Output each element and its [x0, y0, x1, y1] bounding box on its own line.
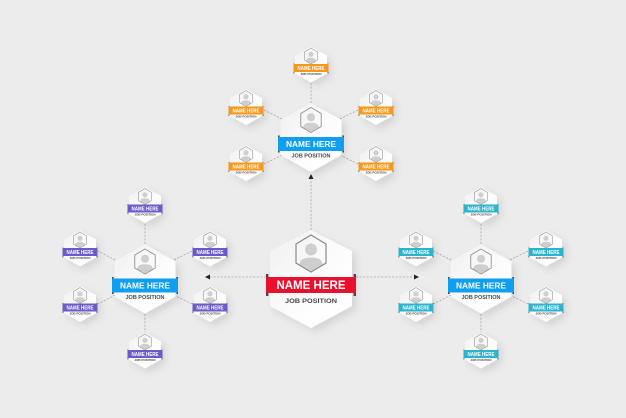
node: purple bottom	[128, 332, 162, 368]
node: left centre manager	[112, 244, 178, 314]
node: teal bottom: NAME HERE	[468, 352, 495, 358]
node: purple lower left: NAME HERE	[66, 305, 94, 311]
node: left centre manager: NAME HERE	[120, 281, 170, 291]
node: purple upper right	[192, 230, 228, 266]
node: teal lower left	[398, 286, 434, 322]
connectors: top group	[264, 83, 358, 164]
node: teal lower right	[528, 286, 564, 322]
node: purple lower right: NAME HERE	[196, 305, 224, 311]
node: purple lower left: JOB POSITION	[70, 312, 91, 316]
node: orange lower left: JOB POSITION	[236, 171, 257, 175]
node: right centre manager: NAME HERE	[456, 281, 506, 291]
node: teal upper right: NAME HERE	[532, 250, 560, 256]
node: teal upper left	[398, 230, 434, 266]
node: orange upper left: NAME HERE	[232, 108, 260, 114]
node: teal top: JOB POSITION	[470, 213, 492, 217]
node: teal lower left: NAME HERE	[402, 305, 430, 311]
node: teal upper right: JOB POSITION	[536, 256, 557, 260]
arrow: main to left group	[205, 274, 266, 280]
connectors: left group	[98, 224, 192, 333]
main name: NAME HERE	[276, 279, 346, 292]
node: teal lower left: JOB POSITION	[406, 312, 427, 316]
arrow: main to top group	[308, 174, 314, 230]
panel: top group	[228, 46, 394, 181]
node: right centre manager	[448, 244, 514, 314]
node: orange lower right	[358, 145, 394, 181]
node: orange lower left: NAME HERE	[232, 164, 260, 170]
red name banner	[266, 277, 356, 293]
node: right centre manager: JOB POSITION	[462, 295, 501, 301]
node: purple upper left	[62, 230, 98, 266]
node: orange top: JOB POSITION	[300, 72, 322, 76]
node: orange upper left: JOB POSITION	[236, 115, 257, 119]
node: orange lower left	[228, 145, 264, 181]
node: purple upper right: JOB POSITION	[200, 256, 221, 260]
node: orange top: NAME HERE	[298, 66, 325, 72]
node: purple upper left: NAME HERE	[66, 250, 94, 256]
node: top centre manager: NAME HERE	[286, 139, 336, 149]
node: teal upper right	[528, 230, 564, 266]
node: orange upper right: NAME HERE	[362, 108, 390, 114]
node: purple lower right	[192, 286, 228, 322]
node: purple lower left	[62, 286, 98, 322]
node: orange lower right: JOB POSITION	[366, 171, 387, 175]
node: purple upper right: NAME HERE	[196, 250, 224, 256]
node: purple bottom: NAME HERE	[132, 352, 159, 358]
main hexagon	[270, 230, 352, 328]
arrow: main to right group	[356, 274, 419, 280]
node: teal bottom: JOB POSITION	[470, 358, 492, 362]
connectors: right group	[433, 224, 528, 333]
node: teal top	[464, 187, 498, 223]
node: orange top	[294, 46, 328, 82]
panel: left group	[62, 187, 228, 368]
node: orange lower right: NAME HERE	[362, 164, 390, 170]
node: teal lower right: JOB POSITION	[536, 312, 557, 316]
node: left centre manager: JOB POSITION	[126, 295, 165, 301]
node: orange upper right: JOB POSITION	[366, 115, 387, 119]
node: teal top: NAME HERE	[468, 206, 495, 212]
node: top centre manager: JOB POSITION	[292, 153, 331, 159]
main job position: JOB POSITION	[285, 298, 337, 305]
banner folds	[266, 274, 356, 296]
node: top centre manager	[278, 103, 344, 172]
node: purple lower right: JOB POSITION	[200, 312, 221, 316]
node: orange upper left	[228, 89, 264, 125]
node: purple top: JOB POSITION	[134, 213, 156, 217]
icon: main person avatar	[296, 235, 326, 272]
node: purple top: NAME HERE	[132, 206, 159, 212]
node: purple upper left: JOB POSITION	[70, 256, 91, 260]
node: orange upper right	[358, 89, 394, 125]
node: teal lower right: NAME HERE	[532, 305, 560, 311]
node: purple bottom: JOB POSITION	[134, 358, 156, 362]
node: teal upper left: NAME HERE	[402, 250, 430, 256]
node: purple top	[128, 187, 162, 223]
node: teal bottom	[464, 332, 498, 368]
node: teal upper left: JOB POSITION	[406, 256, 427, 260]
panel: main central node	[266, 230, 356, 328]
panel: right group	[398, 187, 564, 368]
